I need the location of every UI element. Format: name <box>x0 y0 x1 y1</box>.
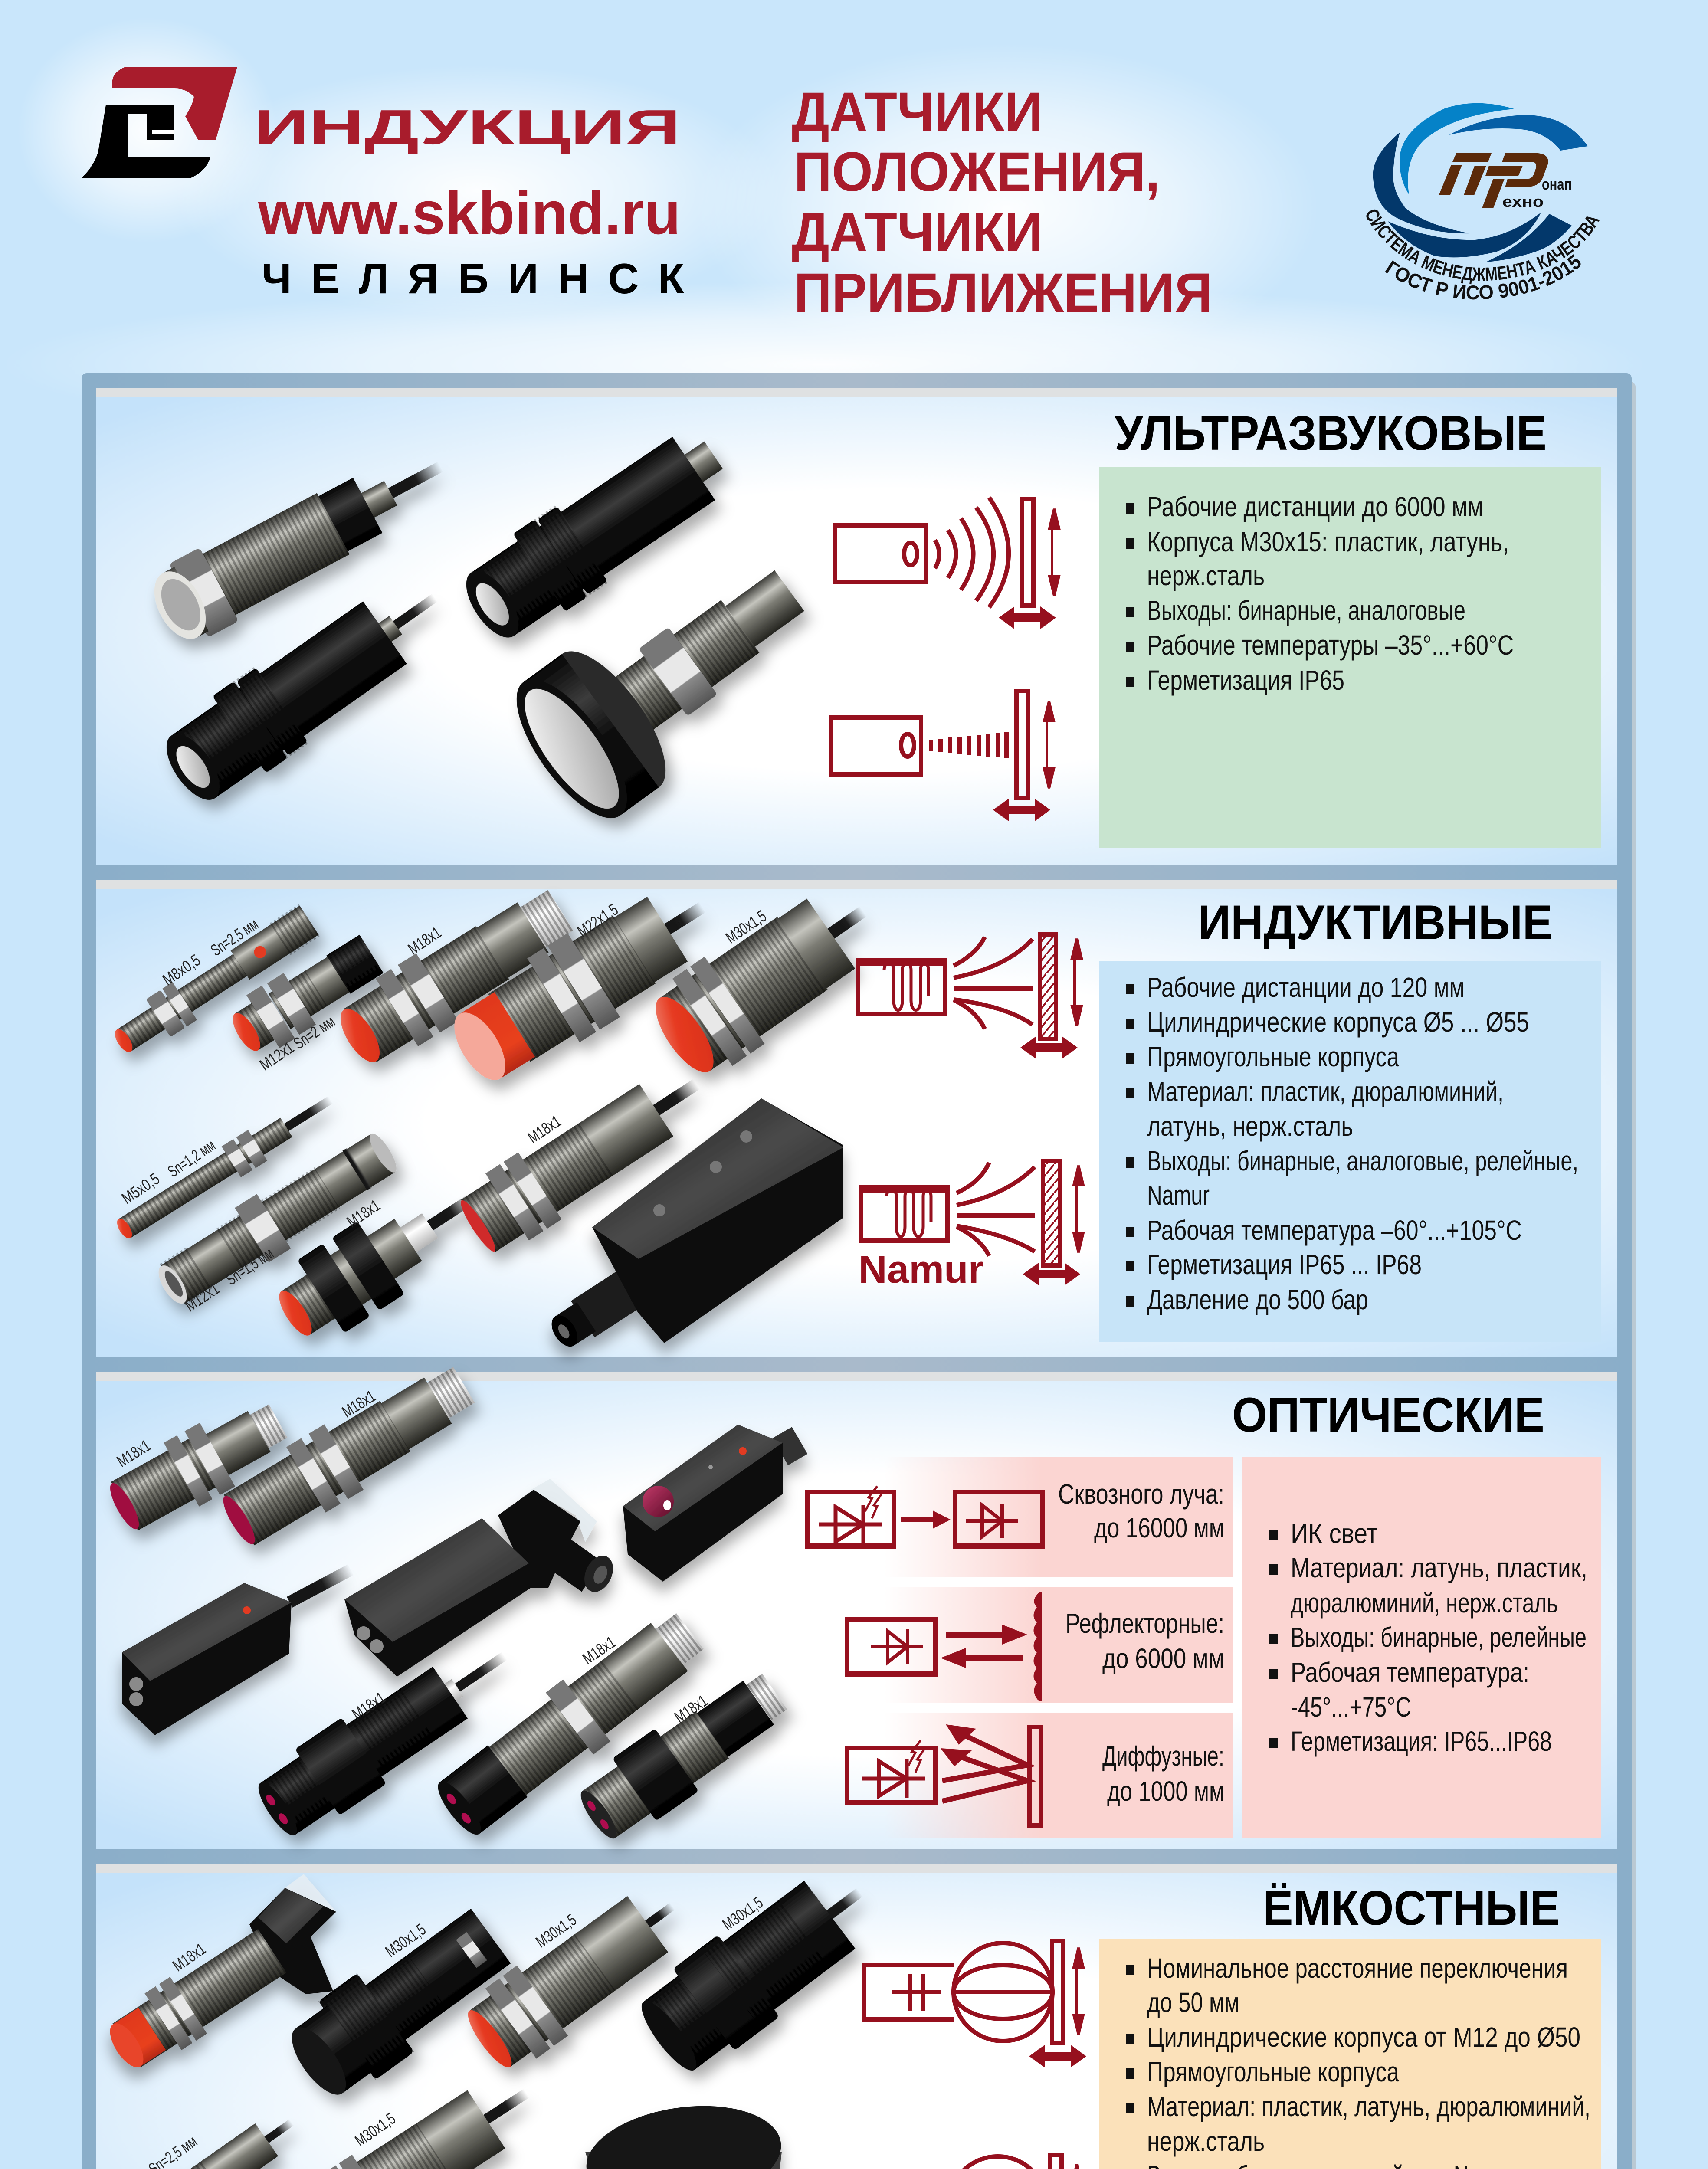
diagram: inductive <box>856 934 1082 1059</box>
sensor: M18 metal <box>451 1051 718 1263</box>
title: ПРИБЛИЖЕНИЯ <box>794 262 1213 324</box>
sensor labels: capacitive: M30x1,5 <box>719 1894 767 1934</box>
sensor labels: inductive: M12x1 <box>257 1039 298 1074</box>
sensor: M5 <box>111 1084 340 1247</box>
sensor labels: inductive: M8x0,5 <box>160 951 204 989</box>
diagram: capacitive <box>864 1941 1086 2067</box>
sensor labels: inductive: Sn=1,2 мм <box>165 1136 219 1181</box>
reflective box: Рефлекторные: <box>1065 1608 1224 1639</box>
sensor: black ultrasonic connector <box>451 416 740 653</box>
header glow <box>0 17 1649 447</box>
reflective box <box>845 1587 1233 1703</box>
title: ПОЛОЖЕНИЯ, <box>794 141 1160 203</box>
spec box: capacitive: Прямоугольные корпуса <box>1147 2056 1399 2087</box>
certification logo: ТехноПрогресс quality system: СИСТЕМА МЕНЕДЖМЕНТА КАЧЕСТВА <box>1360 205 1604 285</box>
sensor: M8 <box>106 901 321 1063</box>
through-beam box <box>805 1457 1233 1577</box>
sensor: M30 metal lower <box>296 2057 550 2169</box>
sensor: M18 black <box>264 1162 495 1355</box>
title: ДАТЧИКИ <box>792 201 1043 263</box>
diagram: capacitive namur <box>856 2155 1084 2169</box>
spec box: inductive: Namur <box>1147 1180 1210 1211</box>
diagram: inductive namur: Namur <box>859 1248 983 1291</box>
spec box: optical: -45°...+75°С <box>1291 1691 1411 1723</box>
sensor labels: inductive: M30x1,5 <box>723 907 770 947</box>
diagram: ultrasonic narrow beam <box>829 691 1054 821</box>
panel: optical <box>96 1352 1617 1851</box>
panel: inductive <box>96 865 1617 1357</box>
sensor: optical block right <box>623 1425 807 1582</box>
sensor labels: inductive: M5x0,5 <box>119 1170 163 1208</box>
spec box: inductive: латунь, нерж.сталь <box>1147 1111 1353 1142</box>
sensor labels: inductive: M12x1 <box>182 1280 223 1315</box>
website: www.skbind.ru <box>258 179 681 247</box>
spec box: optical <box>1242 1457 1601 1838</box>
sensor labels: optical <box>114 1387 711 1727</box>
sensor: M30 black <box>629 1851 890 2084</box>
sensor labels: inductive: Sn=2,5 мм <box>208 915 262 960</box>
spec box: inductive: Герметизация IP65 ... IP68 <box>1147 1249 1422 1280</box>
heading: capacitive: ЁМКОСТНЫЕ <box>1263 1881 1560 1935</box>
spec box: inductive: Рабочие дистанции до 120 мм <box>1147 972 1465 1003</box>
spec box: inductive: Рабочая температура –60°...+105°С <box>1147 1215 1522 1246</box>
panel: capacitive <box>96 1851 1617 2169</box>
sensor: optical block left <box>122 1564 354 1735</box>
sensor: M18 with angled connector <box>99 1874 336 2080</box>
sensor: M12 metal <box>148 1122 406 1317</box>
spec box: capacitive: нерж.сталь <box>1147 2126 1265 2157</box>
spec box: optical: Герметизация: IP65...IP68 <box>1291 1726 1552 1757</box>
spec box: inductive: Выходы: бинарные, аналоговые, релейные, <box>1147 1145 1578 1176</box>
sensor labels: capacitive: M30x1,5 <box>352 2110 399 2150</box>
certification logo: ТехноПрогресс quality system: ГОСТ Р ИСО 9001-2015 <box>1381 250 1586 304</box>
sensor labels: optical: M18x1 <box>580 1633 619 1668</box>
spec box: inductive: Прямоугольные корпуса <box>1147 1041 1399 1072</box>
sensor: M18 <box>122 2168 341 2169</box>
sensor labels: inductive: M22x1,5 <box>574 901 621 940</box>
sensor: black nut metal optical <box>570 1660 797 1851</box>
sensor: puck capacitive <box>554 2094 831 2169</box>
spec box: ultrasonic: Корпуса М30х15: пластик, латунь, <box>1147 526 1509 557</box>
heading: ultrasonic: УЛЬТРАЗВУКОВЫЕ <box>1115 406 1547 460</box>
title <box>792 81 1213 324</box>
spec box: ultrasonic: Выходы: бинарные, аналоговые <box>1147 595 1465 626</box>
main frame <box>82 373 1636 2169</box>
sensor: black ultrasonic cable <box>151 559 462 816</box>
spec box: optical: Рабочая температура: <box>1291 1657 1529 1688</box>
reflective box: до 6000 мм <box>1102 1643 1224 1674</box>
sensor labels: capacitive: M30x1,5 <box>533 1911 580 1951</box>
sensor: metal and black optical <box>427 1600 714 1845</box>
diagram: ultrasonic diffuse beam <box>833 498 1059 629</box>
sensor labels: optical: M18x1 <box>114 1437 154 1471</box>
sensor: M18 black optical <box>247 1623 527 1848</box>
sensor labels: capacitive <box>115 1894 767 2169</box>
certification logo: ТехноПрогресс quality system: онап <box>1542 175 1572 193</box>
spec box: capacitive <box>1099 1939 1601 2169</box>
sensor labels: inductive <box>119 901 770 1315</box>
spec box: ultrasonic <box>1099 467 1601 848</box>
spec box: optical: ИК свет <box>1291 1518 1378 1549</box>
logo: Индукция mark <box>82 67 237 178</box>
spec box: capacitive: Материал: пластик, латунь, дюралюминий, <box>1147 2091 1590 2122</box>
title: ДАТЧИКИ <box>792 81 1043 143</box>
through-beam box: Сквозного луча: <box>1058 1478 1224 1510</box>
sensor labels: capacitive: M18x1 <box>170 1940 209 1975</box>
spec box: inductive: Давление до 500 бар <box>1147 1284 1368 1315</box>
spec box: capacitive: Цилиндрические корпуса от М12 до Ø50 <box>1147 2022 1580 2053</box>
sensor: M30 <box>640 868 893 1088</box>
sensor: optical block centre with connector <box>344 1479 619 1677</box>
sensor: M18 optical long <box>213 1352 484 1557</box>
sensor labels: capacitive: M30x1,5 <box>382 1920 429 1961</box>
diagram: inductive namur <box>859 1161 1083 1291</box>
certification logo: ТехноПрогресс quality system: ехно <box>1502 193 1544 210</box>
heading: optical: ОПТИЧЕСКИЕ <box>1232 1388 1544 1442</box>
city: ЧЕЛЯБИНСК <box>262 255 684 302</box>
spec box: inductive: Материал: пластик, дюралюминий, <box>1147 1076 1504 1107</box>
spec box: ultrasonic: Герметизация IP65 <box>1147 665 1344 696</box>
sensor: M18 optical short <box>100 1389 296 1542</box>
diffuse box <box>845 1713 1233 1838</box>
diffuse box: Диффузные: <box>1102 1740 1224 1772</box>
sensor: M12 short <box>223 927 388 1063</box>
sensor: M18 <box>328 876 582 1076</box>
sensor: metal ultrasonic with cable <box>141 430 460 652</box>
sensor: large disc ultrasonic <box>497 524 838 835</box>
through-beam box: до 16000 мм <box>1094 1512 1224 1543</box>
sensor labels: optical: M18x1 <box>672 1692 711 1727</box>
sensor labels: inductive: Sn=2 мм <box>291 1012 338 1053</box>
diffuse box: до 1000 мм <box>1107 1776 1224 1807</box>
sensor: M30 metal <box>456 1871 698 2080</box>
spec box: optical: Выходы: бинарные, релейные <box>1291 1622 1587 1653</box>
spec box: optical: дюралюминий, нерж.сталь <box>1291 1587 1558 1619</box>
sensor labels: inductive: M18x1 <box>344 1196 384 1231</box>
sensor labels: optical: M18x1 <box>349 1689 389 1723</box>
sensor: white face metal <box>341 2166 546 2169</box>
sensor: M12 <box>104 2100 307 2169</box>
spec box: ultrasonic: Рабочие температуры –35°...+60°С <box>1147 629 1514 661</box>
spec box: inductive <box>1099 961 1601 1342</box>
spec box: inductive: Цилиндрические корпуса Ø5 ... Ø55 <box>1147 1006 1529 1038</box>
panel: ultrasonic <box>96 388 1617 865</box>
certification logo: ТехноПрогресс quality system <box>1360 103 1605 304</box>
spec box: capacitive: Номинальное расстояние переключения <box>1147 1953 1568 1984</box>
heading: inductive: ИНДУКТИВНЫЕ <box>1198 895 1553 950</box>
spec box: ultrasonic: Рабочие дистанции до 6000 мм <box>1147 491 1483 522</box>
sensor labels: inductive: M18x1 <box>525 1112 564 1147</box>
company name: ИНДУКЦИЯ <box>254 100 681 154</box>
spec box: optical: Материал: латунь, пластик, <box>1291 1552 1587 1583</box>
sensor labels: optical: M18x1 <box>339 1387 379 1422</box>
sensor: M22 with red cap <box>438 865 728 1098</box>
sensor labels: inductive: M18x1 <box>405 924 445 958</box>
sensor labels: inductive: Sn=1,5 мм <box>223 1244 277 1289</box>
spec box: capacitive: до 50 мм <box>1147 1987 1239 2018</box>
sensor: rectangular inductive block <box>544 1098 843 1355</box>
spec box: ultrasonic: нерж.сталь <box>1147 560 1265 591</box>
sensor: black flange M30 <box>277 1897 519 2110</box>
